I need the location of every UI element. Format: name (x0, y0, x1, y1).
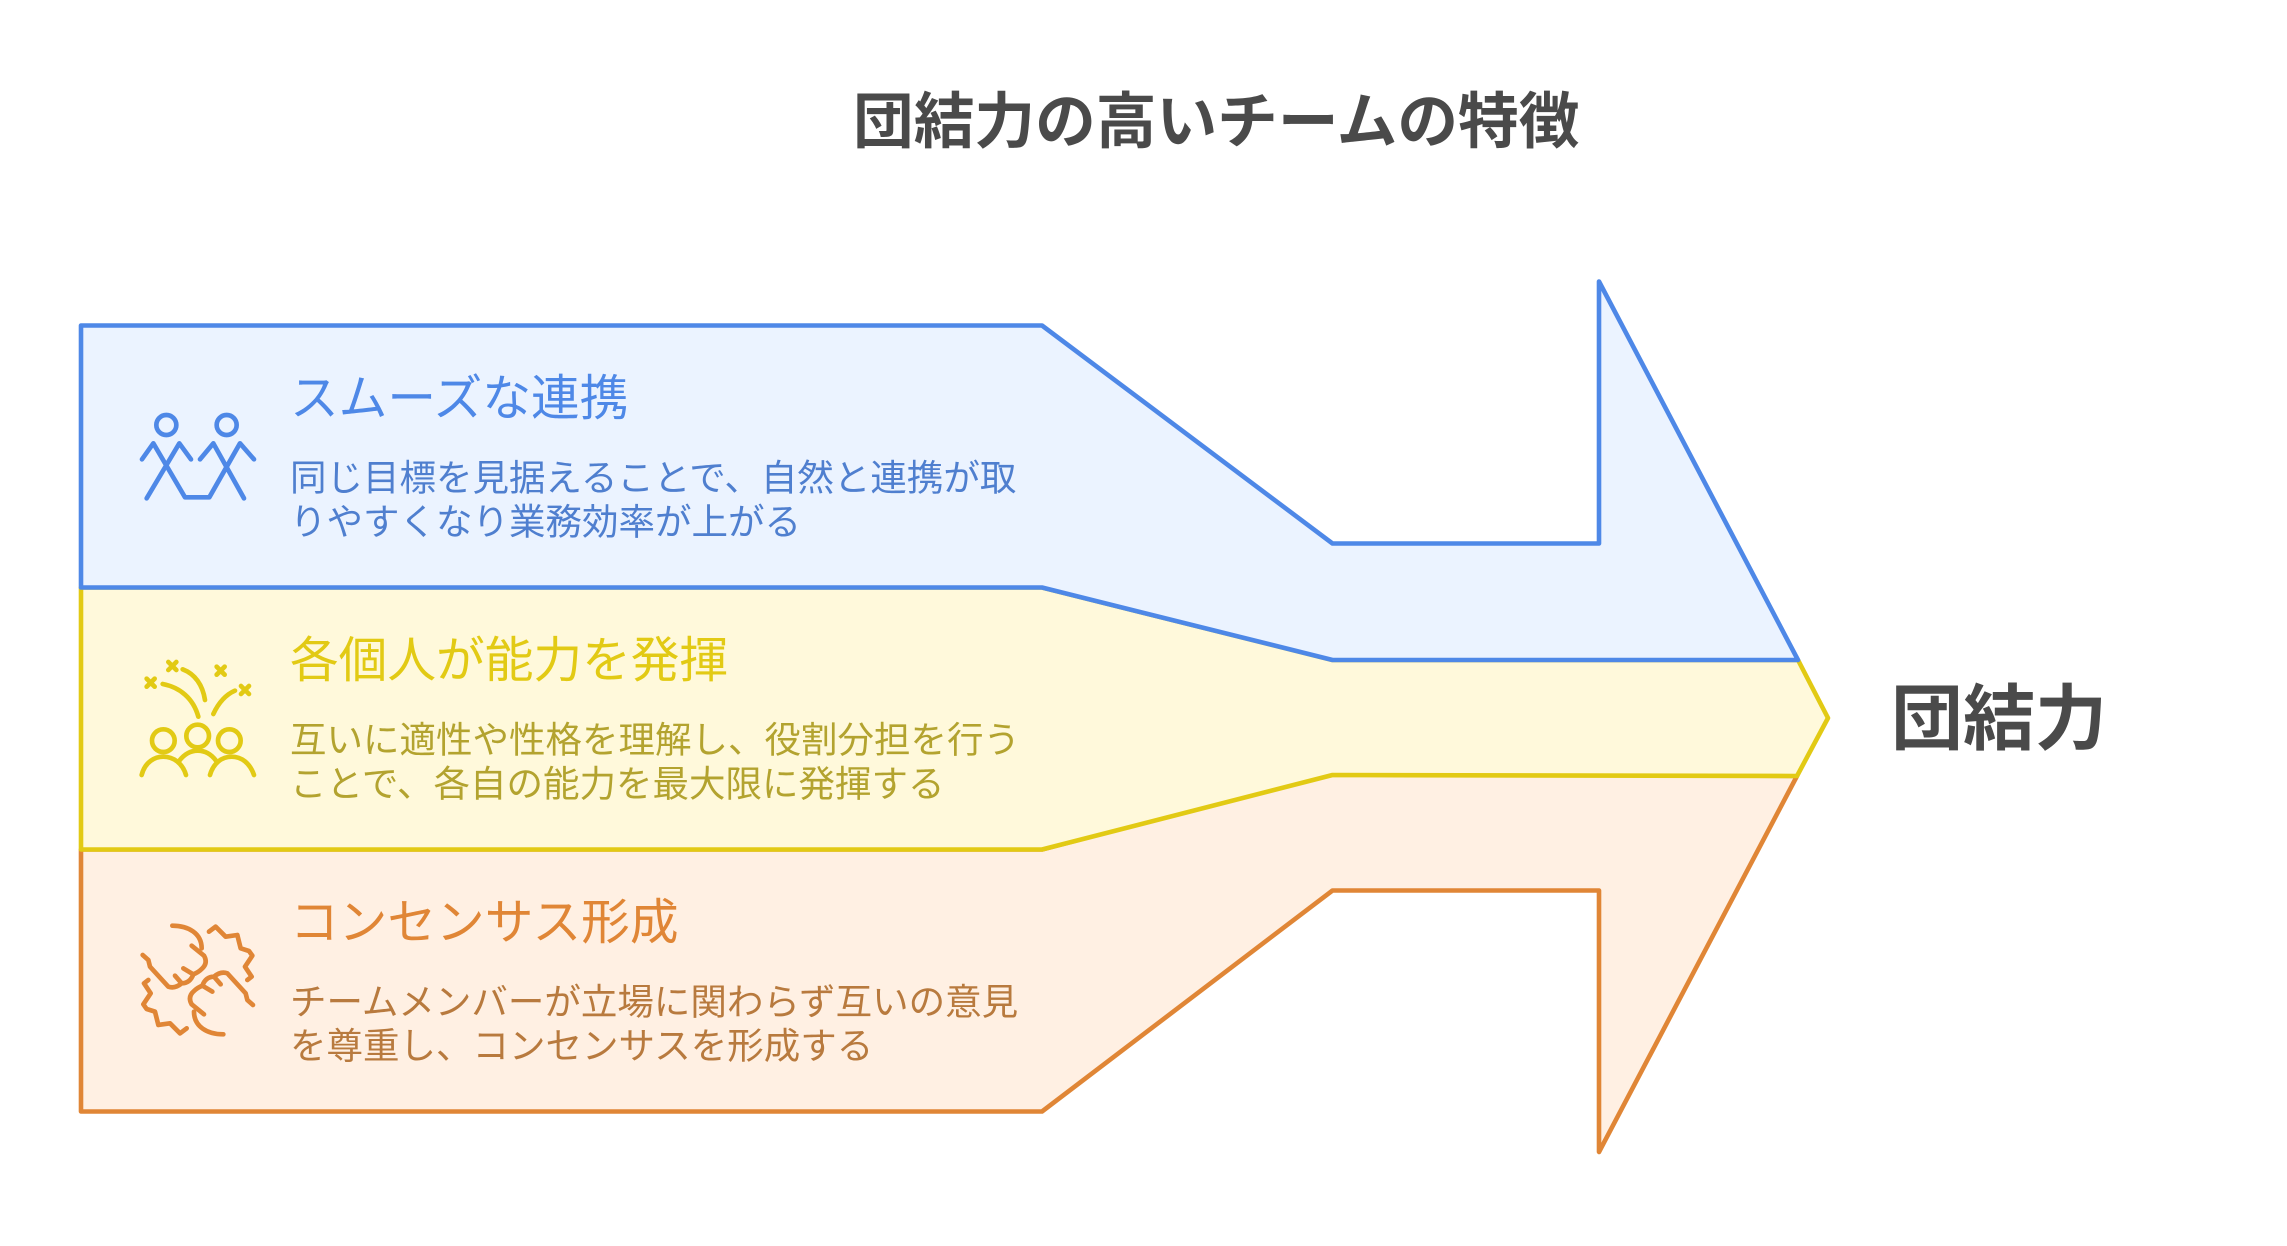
icon: two people holding hands (142, 415, 254, 498)
title: 団結力の高いチームの特徴 (853, 74, 1579, 160)
icon: clasped hands (143, 926, 253, 1034)
body: individual ability: ことで、各自の能力を最大限に発揮する (290, 754, 944, 808)
panel: smooth collaboration text (290, 360, 1016, 546)
panel: individual ability text (290, 622, 1020, 808)
body: consensus: チームメンバーが立場に関わらず互いの意見 (290, 972, 1018, 1026)
body: smooth collaboration: 同じ目標を見据えることで、自然と連携が取 (290, 448, 1016, 502)
body: smooth collaboration: りやすくなり業務効率が上がる (290, 492, 801, 546)
icon: team with fireworks (142, 662, 254, 775)
heading: individual ability: 各個人が能力を発揮 (290, 622, 728, 692)
heading: smooth collaboration: スムーズな連携 (290, 360, 628, 430)
outcome label: 団結力 (1891, 660, 2107, 765)
arrow segment: yellow (81, 588, 1828, 850)
arrow segment: orange (81, 773, 1797, 1152)
body: individual ability: 互いに適性や性格を理解し、役割分担を行う (290, 710, 1020, 764)
panel: consensus text (290, 884, 1018, 1070)
body: consensus: を尊重し、コンセンサスを形成する (290, 1016, 873, 1070)
heading: consensus: コンセンサス形成 (290, 884, 679, 954)
arrow segment: blue (81, 282, 1798, 660)
